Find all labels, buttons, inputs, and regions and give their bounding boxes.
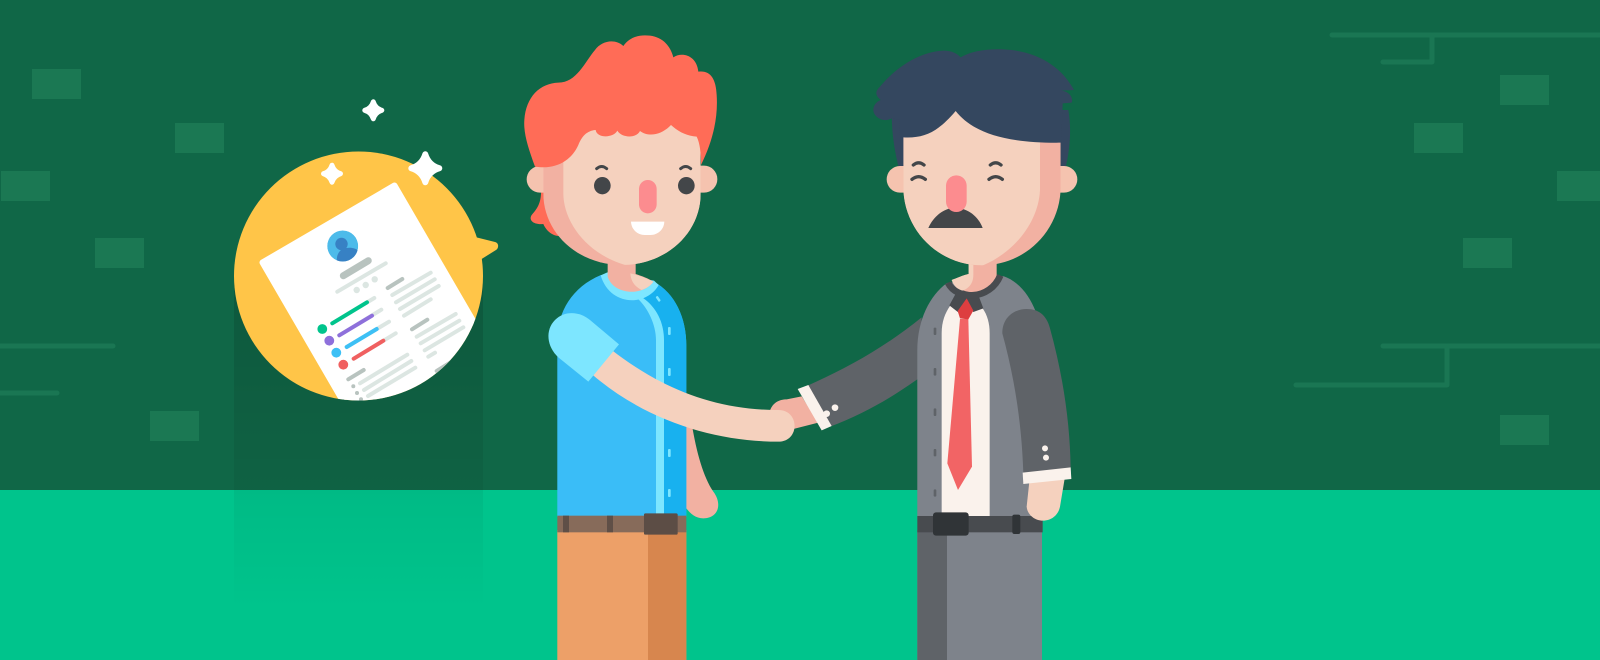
resume badge — [234, 152, 498, 400]
resume badge shadow — [234, 276, 483, 616]
lowered cuff buttons — [1042, 445, 1049, 461]
resume contact dots — [354, 276, 378, 293]
floor — [0, 490, 1600, 660]
eyes and brows — [912, 163, 1002, 179]
man with red hair — [524, 35, 718, 660]
tie — [947, 319, 972, 490]
back hair — [531, 187, 573, 236]
resume header text lines — [332, 261, 463, 396]
sleeve — [807, 317, 922, 427]
shaking hand — [770, 396, 818, 429]
right ear — [1047, 166, 1077, 193]
jacket buttons — [934, 328, 936, 497]
lowered hand — [1027, 477, 1065, 521]
white shirt — [934, 291, 990, 517]
background wall — [0, 0, 1600, 490]
belt — [917, 512, 1043, 536]
belt — [557, 513, 686, 535]
resume document — [260, 182, 476, 400]
arm — [592, 350, 795, 442]
suit man head — [873, 49, 1077, 271]
red hair and head — [524, 35, 717, 270]
lowered cuff — [1023, 467, 1071, 484]
skill dots — [317, 324, 348, 370]
badge tail — [475, 237, 498, 260]
profile photo — [327, 230, 358, 262]
wall circuit lines — [0, 35, 1600, 393]
collar and neck — [601, 262, 659, 300]
eyebrows — [597, 166, 691, 169]
face — [903, 111, 1061, 266]
wall bricks — [1, 69, 1600, 445]
left ear — [887, 166, 917, 193]
nose — [946, 175, 967, 212]
handshake arm of red haired man — [548, 313, 795, 442]
front hair — [873, 49, 1074, 143]
extended arm — [770, 317, 922, 430]
hair — [524, 35, 717, 167]
skill bars — [332, 302, 383, 359]
shirt placket stripe — [638, 298, 664, 517]
back hair — [892, 110, 1070, 170]
shirt collar — [949, 291, 983, 312]
neck and collar ring — [948, 260, 1000, 295]
left ear — [527, 166, 557, 193]
sparkles — [324, 102, 439, 182]
moustache — [928, 208, 983, 228]
cuff buttons — [823, 404, 838, 417]
right ear — [687, 166, 717, 193]
jacket — [917, 276, 1042, 520]
cuff — [798, 385, 832, 430]
orange trousers — [557, 530, 686, 660]
smile — [631, 222, 664, 235]
nose — [639, 180, 657, 213]
face — [544, 125, 701, 265]
resume list bullets — [351, 384, 363, 401]
shirt placket shade — [643, 282, 686, 517]
hanging arm — [685, 423, 718, 518]
lowered arm — [1002, 309, 1071, 521]
short sleeve — [548, 313, 619, 382]
shirt stitches — [655, 296, 671, 497]
badge circle — [234, 152, 483, 400]
grey trousers — [917, 530, 1042, 660]
blue shirt — [557, 275, 686, 517]
tie knot — [958, 298, 973, 319]
lowered sleeve — [1002, 309, 1071, 473]
eyes — [594, 177, 695, 194]
man in grey suit — [770, 49, 1077, 660]
